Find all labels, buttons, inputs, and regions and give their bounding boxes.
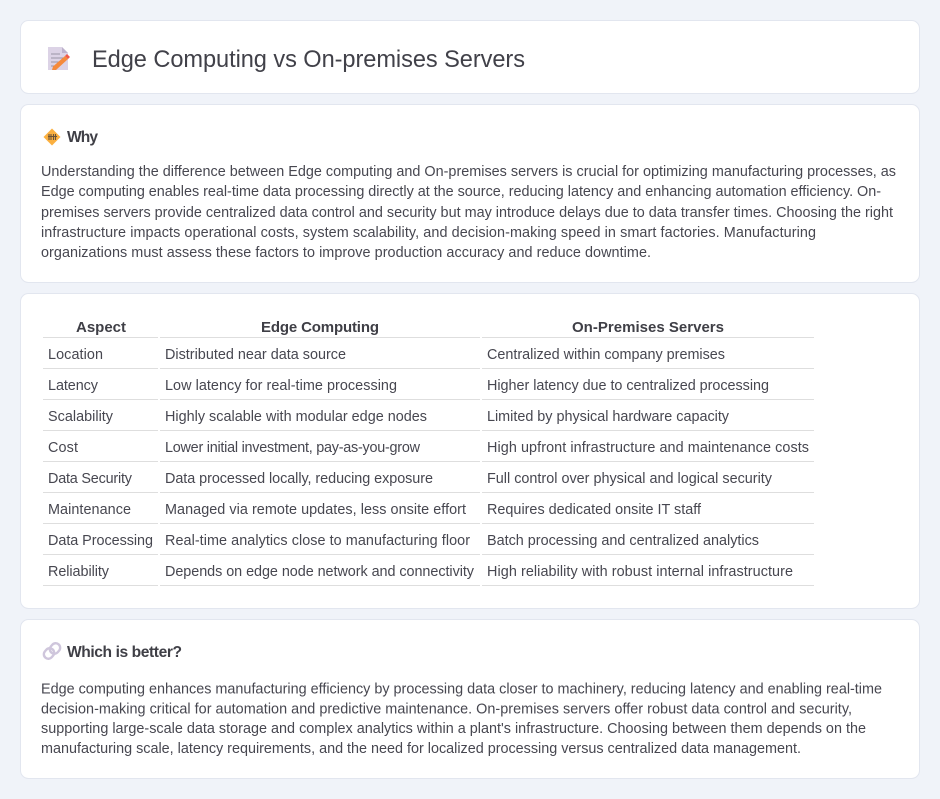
table header row bbox=[76, 319, 724, 336]
row: reliability: High reliability with robust internal infrastructure bbox=[487, 564, 793, 580]
panel: title header bbox=[20, 20, 920, 94]
row: data security: Full control over physical and logical security bbox=[487, 471, 773, 487]
row: cost: Cost bbox=[48, 440, 78, 456]
icon: memo with pencil bbox=[48, 47, 70, 70]
row: location: Distributed near data source bbox=[165, 347, 346, 363]
text block: why explanation: premises servers provide centralized data control and security but may introduce delays due to data transfer times. Choosing the right bbox=[41, 205, 893, 221]
table header row: On-Premises Servers bbox=[572, 319, 724, 336]
row: data security: Data processed locally, reducing exposure bbox=[165, 471, 433, 487]
text block: why explanation: Edge computing enables real-time data processing directly at the source, reducing latency and enhancing automation efficiency. On- bbox=[41, 184, 881, 200]
icon: warning diamond bbox=[44, 128, 60, 146]
text block: which is better explanation: supporting large-scale data storage and complex analytics within a plant's infrastructure. Choosing between them depends on the bbox=[41, 721, 866, 737]
row: maintenance: Requires dedicated onsite IT staff bbox=[487, 502, 702, 518]
row: scalability: Highly scalable with modular edge nodes bbox=[165, 409, 427, 425]
heading: which is better: Which is better? bbox=[67, 644, 182, 661]
text block: which is better explanation: manufacturing scale, latency requirements, and the need for localized processing versus centralized data management. bbox=[41, 741, 801, 757]
row: reliability bbox=[48, 564, 793, 580]
row: location: Location bbox=[48, 347, 103, 363]
row: data processing: Real-time analytics close to manufacturing floor bbox=[165, 533, 470, 549]
text block: which is better explanation: Edge computing enhances manufacturing efficiency by processing data closer to machinery, reducing latency and enabling real-time bbox=[41, 682, 882, 698]
row: cost bbox=[48, 440, 809, 456]
row: scalability: Scalability bbox=[48, 409, 114, 425]
row: location bbox=[48, 347, 725, 363]
row: cost: Lower initial investment, pay-as-you-grow bbox=[165, 440, 421, 456]
row: scalability: Limited by physical hardware capacity bbox=[487, 409, 730, 425]
text block: why explanation: infrastructure impacts operational costs, system scalability, and decision-making speed in smart factories. Manufacturing bbox=[41, 225, 816, 241]
panel: why bbox=[20, 104, 920, 282]
heading: why: Why bbox=[67, 129, 98, 146]
row: cost: High upfront infrastructure and maintenance costs bbox=[487, 440, 809, 456]
row: data processing: Data Processing bbox=[48, 533, 153, 549]
row: maintenance: Maintenance bbox=[48, 502, 131, 518]
row: data security: Data Security bbox=[48, 471, 133, 487]
row: scalability bbox=[48, 409, 730, 425]
text block: which is better explanation: decision-making critical for automation and predictive maintenance. On-premises servers offer robust data control and security, bbox=[41, 702, 852, 718]
table header row: Edge Computing bbox=[261, 319, 379, 336]
text block: why explanation: organizations must assess these factors to improve production accuracy and reduce downtime. bbox=[41, 245, 651, 261]
panel: comparison table bbox=[20, 294, 920, 608]
row: data security bbox=[48, 471, 773, 487]
row: reliability: Depends on edge node network and connectivity bbox=[165, 564, 475, 580]
row: data processing bbox=[48, 533, 759, 549]
text block: why explanation: Understanding the difference between Edge computing and On-premises servers is crucial for optimizing manufacturing processes, as bbox=[41, 164, 896, 180]
row: data processing: Batch processing and centralized analytics bbox=[487, 533, 759, 549]
title: Edge Computing vs On-premises Servers bbox=[92, 47, 525, 73]
text block: which is better explanation bbox=[41, 682, 882, 757]
row: maintenance bbox=[48, 502, 702, 518]
row: latency: Low latency for real-time processing bbox=[165, 378, 397, 394]
table header row: Aspect bbox=[76, 319, 126, 336]
row: location: Centralized within company premises bbox=[487, 347, 725, 363]
row: latency: Latency bbox=[48, 378, 99, 394]
row: maintenance: Managed via remote updates, less onsite effort bbox=[165, 502, 466, 518]
row: latency: Higher latency due to centralized processing bbox=[487, 378, 769, 394]
row: reliability: Reliability bbox=[48, 564, 110, 580]
icon: chain link bbox=[42, 641, 62, 661]
panel: which is better bbox=[20, 620, 920, 778]
row: latency bbox=[48, 378, 769, 394]
text block: why explanation bbox=[41, 164, 896, 261]
